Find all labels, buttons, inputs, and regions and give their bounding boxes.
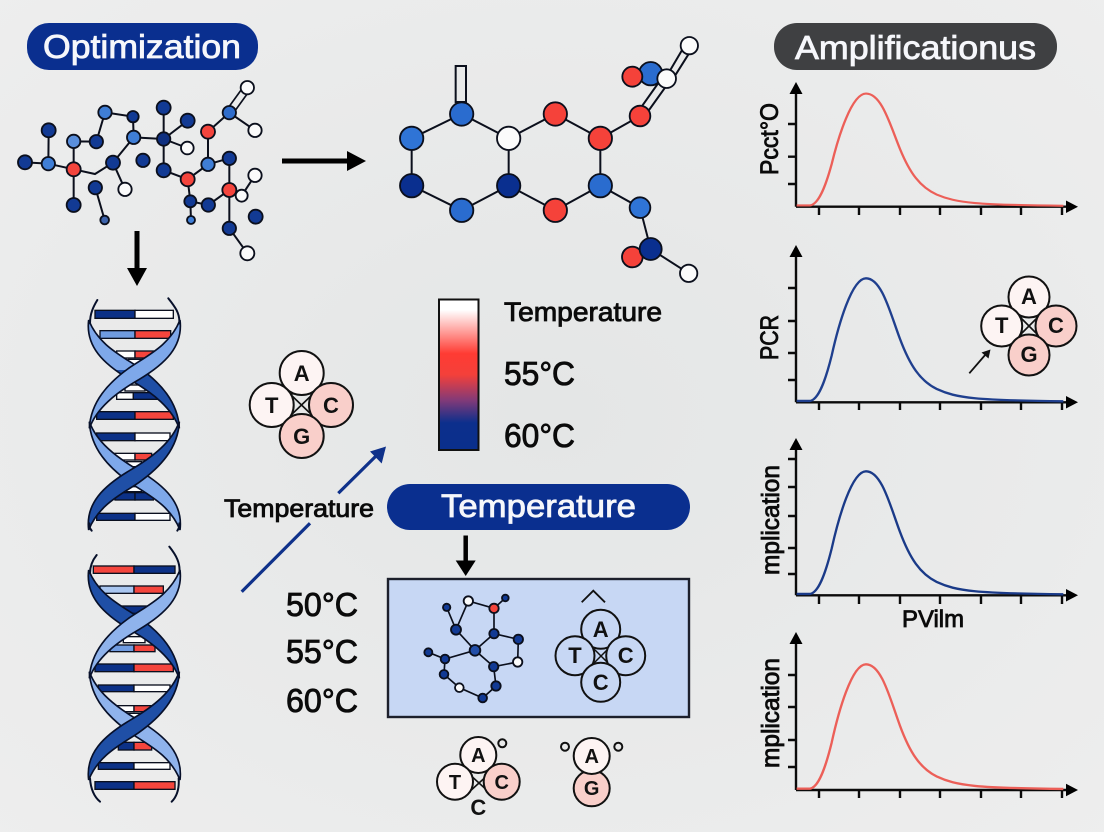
chart 3 axis label: mplication	[757, 465, 785, 575]
temperature list: 50°C 55°C 60°C: 50°C	[286, 586, 358, 623]
nucleotide cluster: A T C: A	[471, 745, 486, 767]
heading: Amplificationus: Amplificationus	[795, 29, 1036, 66]
colour bar label: Temperature: Temperature	[504, 297, 662, 327]
chart 1 axis label: Pcct°O	[756, 103, 784, 175]
nucleotide clover in box	[556, 610, 645, 702]
chart 2: blue curve	[788, 245, 1078, 410]
panel: blue box	[388, 579, 689, 717]
nucleotide clover: center left	[250, 351, 353, 458]
small arrow to inset clover	[969, 350, 990, 373]
chart 1: red curve	[788, 82, 1078, 215]
nucleotide clover: center left: G	[293, 424, 310, 449]
temperature list: 50°C 55°C 60°C: 60°C	[286, 682, 358, 719]
nucleotide clover: chart inset	[981, 276, 1076, 376]
nucleotide clover: chart inset: A	[1021, 284, 1037, 309]
nucleotide clover in box: C	[618, 643, 634, 668]
nucleotide cluster: A G: A	[584, 746, 599, 768]
chart 4 axis label: mplication	[757, 658, 785, 768]
heading: Optimization	[27, 23, 258, 70]
colour bar label: 60°C: 60°C	[504, 417, 575, 454]
nucleotide clover: center left: T	[265, 393, 279, 418]
nucleotide cluster: A G	[561, 738, 622, 806]
temperature color bar	[439, 300, 478, 450]
nucleotide cluster: A T C: C	[494, 772, 509, 794]
arrow: down to box	[456, 536, 476, 576]
heading: Temperature pill	[387, 484, 690, 530]
nucleotide clover: chart inset: T	[995, 313, 1009, 338]
nucleotide clover in box: A	[593, 617, 609, 642]
colour bar label: 55°C: 55°C	[504, 355, 575, 392]
nucleotide cluster: A T C	[437, 737, 520, 820]
nucleotide clover: center left: C	[323, 393, 339, 418]
chart 3: blue curve	[788, 438, 1078, 604]
nucleotide clover in box: C	[593, 670, 609, 695]
DNA helix: upper	[88, 298, 180, 531]
nucleotide clover: chart inset: G	[1020, 342, 1038, 367]
chart 4: red curve	[788, 632, 1078, 798]
DNA helix: lower	[88, 547, 180, 802]
heading: Optimization: Optimization	[43, 28, 241, 65]
arrow: down to DNA	[127, 231, 147, 286]
chart 2 axis label: PCR	[756, 315, 784, 360]
heading: Temperature pill: Temperature	[441, 488, 636, 524]
nucleotide clover: center left: A	[294, 361, 310, 386]
caret above clover	[582, 591, 605, 602]
chart 3 x label: PVilm: PVilm	[902, 606, 964, 633]
molecule: branched network	[18, 81, 263, 260]
label: Temperature: Temperature	[224, 495, 374, 523]
molecule: fused rings	[400, 37, 698, 282]
nucleotide cluster: A T C: C	[470, 795, 486, 820]
temperature list: 50°C 55°C 60°C: 55°C	[286, 633, 358, 670]
nucleotide cluster: A G: G	[584, 778, 599, 800]
diagonal arrow	[242, 446, 386, 592]
molecule in box	[424, 595, 523, 702]
heading: Amplificationus	[774, 23, 1057, 70]
temperature list: 50°C 55°C 60°C	[286, 586, 358, 719]
arrow: right to ring molecule	[282, 151, 366, 171]
nucleotide clover: chart inset: C	[1048, 313, 1064, 338]
nucleotide cluster: A T C: T	[449, 772, 461, 794]
nucleotide clover in box: T	[568, 643, 582, 668]
